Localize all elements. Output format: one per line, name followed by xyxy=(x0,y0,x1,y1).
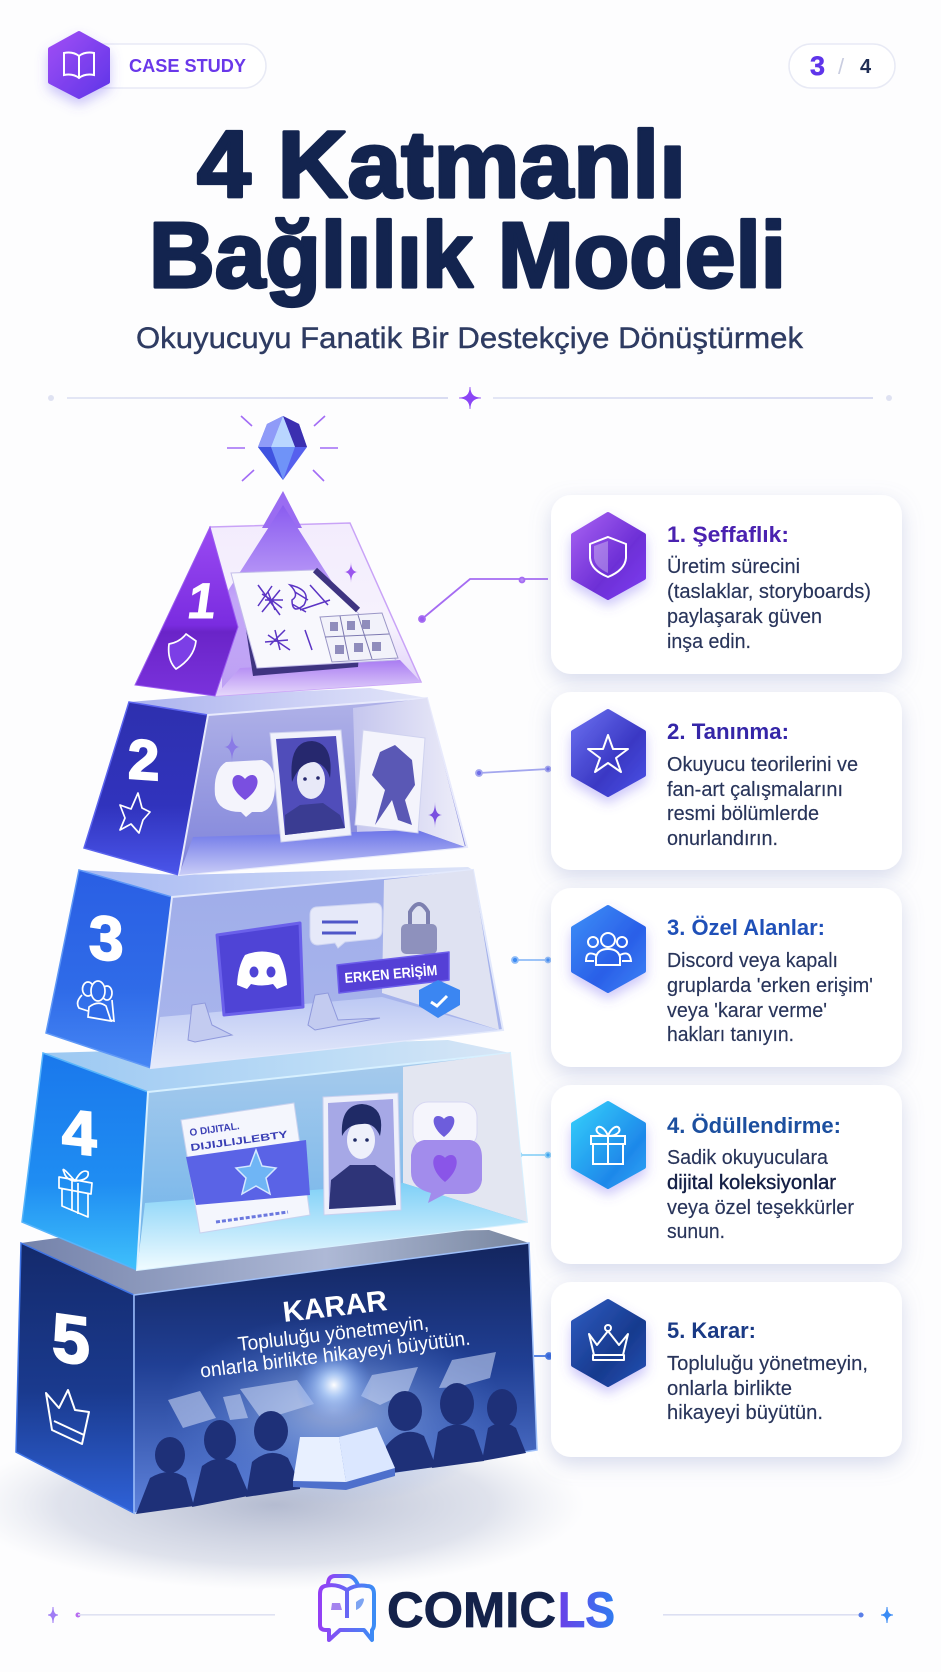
card 4: ödüllendirme: veya özel teşekkürler xyxy=(667,1197,854,1219)
page counter: 4 xyxy=(860,56,872,78)
layer 3: özel alanlar xyxy=(46,867,503,1068)
card 1: şeffaflık: (taslaklar, storyboards) xyxy=(667,581,871,603)
crystal xyxy=(227,416,338,481)
digital collectible card: O DIJITAL. xyxy=(189,1121,241,1139)
card 4: ödüllendirme: 4. Ödüllendirme: xyxy=(667,1113,841,1138)
storyboard panels xyxy=(320,613,398,662)
fan art card: character xyxy=(270,730,351,842)
card 3: özel alanlar: veya 'karar verme' xyxy=(667,1000,827,1022)
pyramid xyxy=(16,491,537,1514)
number 5: 5 xyxy=(52,1299,90,1380)
layer 5: karar xyxy=(16,1230,537,1514)
icon: crown xyxy=(46,1390,89,1444)
page counter: / xyxy=(838,54,845,79)
card 1: şeffaflık: inşa edin. xyxy=(667,631,751,653)
hexagon icon: crown xyxy=(573,1301,644,1385)
number 4: 4 xyxy=(62,1097,97,1170)
digital collectible card: DIJIJLIJLEBTY xyxy=(190,1129,289,1154)
icon: shield xyxy=(169,634,196,669)
subtitle: Okuyucuyu Fanatik Bir Destekçiye Dönüştürmek xyxy=(136,322,804,355)
card 3: özel alanlar: hakları tanıyın. xyxy=(667,1024,794,1046)
card 3: özel alanlar: gruplarda 'erken erişim' xyxy=(667,975,873,997)
card 2: tanınma: onurlandırın. xyxy=(667,828,778,850)
card 2: tanınma: 2. Tanınma: xyxy=(667,719,789,744)
lock xyxy=(401,904,437,954)
number 1: 1 xyxy=(184,573,220,629)
logo icon xyxy=(320,1576,374,1640)
title: Bağlılık Modeli xyxy=(149,203,786,307)
card 1: şeffaflık: paylaşarak güven xyxy=(667,606,822,628)
karar text: Topluluğu yönetmeyin, xyxy=(237,1312,430,1356)
card 5: karar: hikayeyi büyütün. xyxy=(667,1402,823,1424)
footer divider left xyxy=(48,1607,275,1623)
connector 3 xyxy=(512,957,550,963)
connector 1 xyxy=(419,578,548,622)
card 5: karar: 5. Karar: xyxy=(667,1318,756,1343)
fan art card: warrior xyxy=(355,730,425,833)
number 3: 3 xyxy=(89,903,123,975)
card 1: şeffaflık: Üretim sürecini xyxy=(667,556,800,578)
card 5: karar: Topluluğu yönetmeyin, xyxy=(667,1353,868,1375)
karar text: KARAR xyxy=(281,1285,389,1329)
ground shadow xyxy=(0,1420,585,1590)
card 2: tanınma: Okuyucu teorilerini ve xyxy=(667,754,858,776)
silhouettes xyxy=(136,1383,526,1514)
erken erişim badge xyxy=(337,952,449,993)
hexagon icon: gift xyxy=(573,1103,644,1187)
karar text xyxy=(199,1285,472,1383)
glow: central light xyxy=(164,1315,504,1505)
card 2: tanınma: fan-art çalışmalarını xyxy=(667,779,843,801)
layer 2: tanınma xyxy=(84,688,467,875)
card 1: şeffaflık xyxy=(551,495,902,674)
card 4: ödüllendirme xyxy=(551,1085,902,1264)
hexagon icon: shield xyxy=(573,514,644,598)
layer 4: ödüllendirme xyxy=(22,1040,527,1270)
title: 4 Katmanlı xyxy=(197,112,686,218)
card 3: özel alanlar: Discord veya kapalı xyxy=(667,950,838,972)
karar text: onlarla birlikte hikayeyi büyütün. xyxy=(199,1328,472,1383)
connector 2 xyxy=(476,766,550,776)
verified shield xyxy=(419,980,460,1018)
icon: people xyxy=(78,981,114,1021)
logo: LS xyxy=(558,1582,615,1638)
card 2: tanınma xyxy=(551,692,902,870)
hexagon icon: people xyxy=(573,907,644,991)
header divider xyxy=(48,387,892,409)
pill: case study xyxy=(80,44,266,88)
layer 1: şeffaflık xyxy=(135,491,421,696)
connector 5 xyxy=(529,1353,552,1359)
connector 4 xyxy=(516,1152,550,1158)
card 4: ödüllendirme: Sadik okuyuculara xyxy=(667,1147,829,1169)
icon: book hexagon xyxy=(50,33,108,97)
card 3: özel alanlar: 3. Özel Alanlar: xyxy=(667,915,825,940)
title xyxy=(149,112,786,307)
sketch book xyxy=(231,570,396,676)
sparkle xyxy=(344,562,358,583)
connectors xyxy=(419,578,552,1359)
footer divider right xyxy=(663,1607,893,1623)
card 3: özel alanlar xyxy=(551,888,902,1067)
logo wordmark: COMIC xyxy=(387,1582,556,1638)
page counter: 3 xyxy=(810,51,825,81)
floor figures xyxy=(188,993,380,1042)
card 5: karar xyxy=(551,1282,902,1457)
page counter xyxy=(789,44,895,88)
number 2: 2 xyxy=(128,727,159,792)
card 1: şeffaflık: 1. Şeffaflık: xyxy=(667,522,789,547)
chat bubble xyxy=(310,903,382,948)
floating comic pages xyxy=(168,1352,496,1428)
open book xyxy=(293,1427,395,1490)
card 5: karar: onlarla birlikte xyxy=(667,1378,792,1400)
card 4: ödüllendirme: dijital koleksiyonlar xyxy=(667,1172,836,1194)
logo xyxy=(320,1576,615,1640)
erken erişim badge: ERKEN ERİŞİM xyxy=(344,962,438,987)
character card xyxy=(323,1093,401,1215)
icon: gift xyxy=(59,1169,92,1217)
label: case study: CASE STUDY xyxy=(129,56,246,76)
card 2: tanınma: resmi bölümlerde xyxy=(667,803,819,825)
case study badge xyxy=(50,33,266,97)
sparkle xyxy=(428,802,442,828)
card 4: ödüllendirme: sunun. xyxy=(667,1221,725,1243)
heart speech bubble xyxy=(215,760,275,817)
heart bubbles xyxy=(411,1102,482,1203)
digital collectible card xyxy=(181,1103,310,1233)
hexagon icon: star xyxy=(573,711,644,795)
icon: star xyxy=(120,793,150,833)
discord tile xyxy=(217,923,303,1015)
